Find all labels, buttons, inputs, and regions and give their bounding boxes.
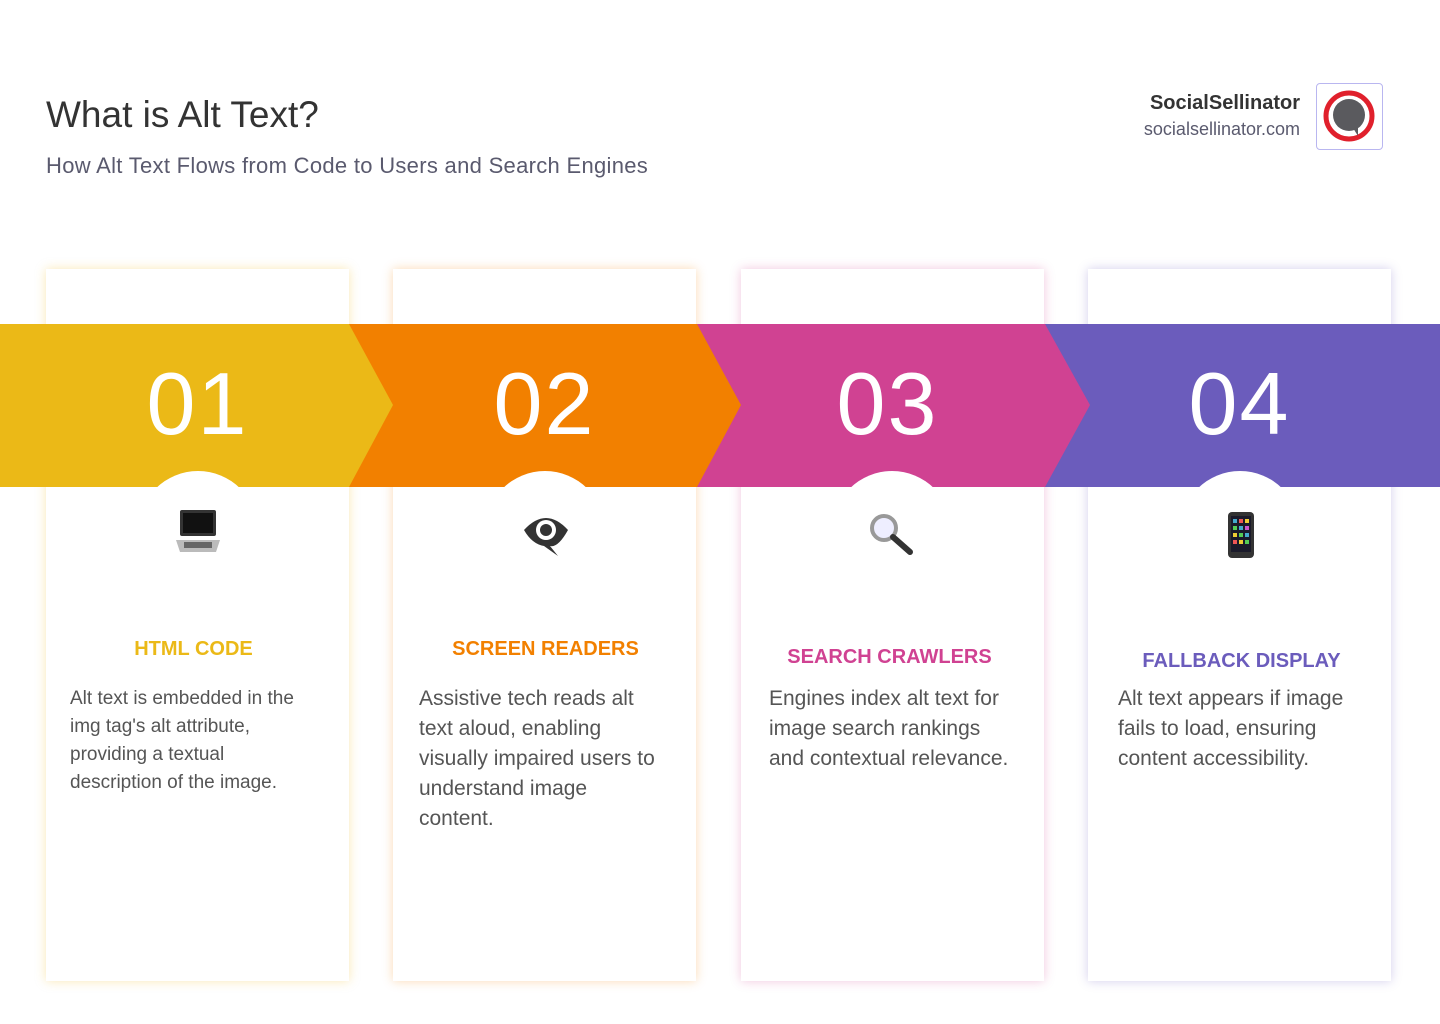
banner arrows	[0, 324, 1440, 487]
text 4: Alt text appears if image fails to load, ensuring content accessibility.	[1118, 687, 1343, 770]
text 3: Engines index alt text for image search rankings and contextual relevance.	[769, 687, 1008, 770]
card 1	[46, 269, 349, 981]
icon: magnifier	[870, 514, 913, 555]
icon: laptop	[176, 510, 220, 552]
icon: eye	[524, 518, 568, 556]
numbers: 01	[147, 354, 248, 453]
brand name: SocialSellinator	[1150, 92, 1300, 114]
text 1: Alt text is embedded in the img tag's alt attribute, providing a textual description of the image.	[70, 688, 294, 793]
bumps	[138, 471, 258, 591]
icon: phone	[1228, 512, 1254, 558]
card 2	[393, 269, 696, 981]
brand	[1144, 83, 1383, 150]
text: 03	[837, 354, 938, 453]
heading 3: SEARCH CRAWLERS	[787, 646, 992, 668]
text 2: Assistive tech reads alt text aloud, enabling visually impaired users to understand image content.	[419, 687, 655, 830]
text: 04	[1189, 354, 1290, 453]
title: What is Alt Text?	[46, 94, 319, 135]
card 4	[1088, 269, 1391, 981]
heading 1: HTML CODE	[134, 638, 253, 660]
heading 4: FALLBACK DISPLAY	[1142, 650, 1341, 672]
heading 2: SCREEN READERS	[452, 638, 639, 660]
logo	[1316, 83, 1383, 150]
text: 02	[494, 354, 595, 453]
card 3	[741, 269, 1044, 981]
subtitle: How Alt Text Flows from Code to Users and Search Engines	[46, 153, 648, 178]
brand url: socialsellinator.com	[1144, 119, 1300, 139]
